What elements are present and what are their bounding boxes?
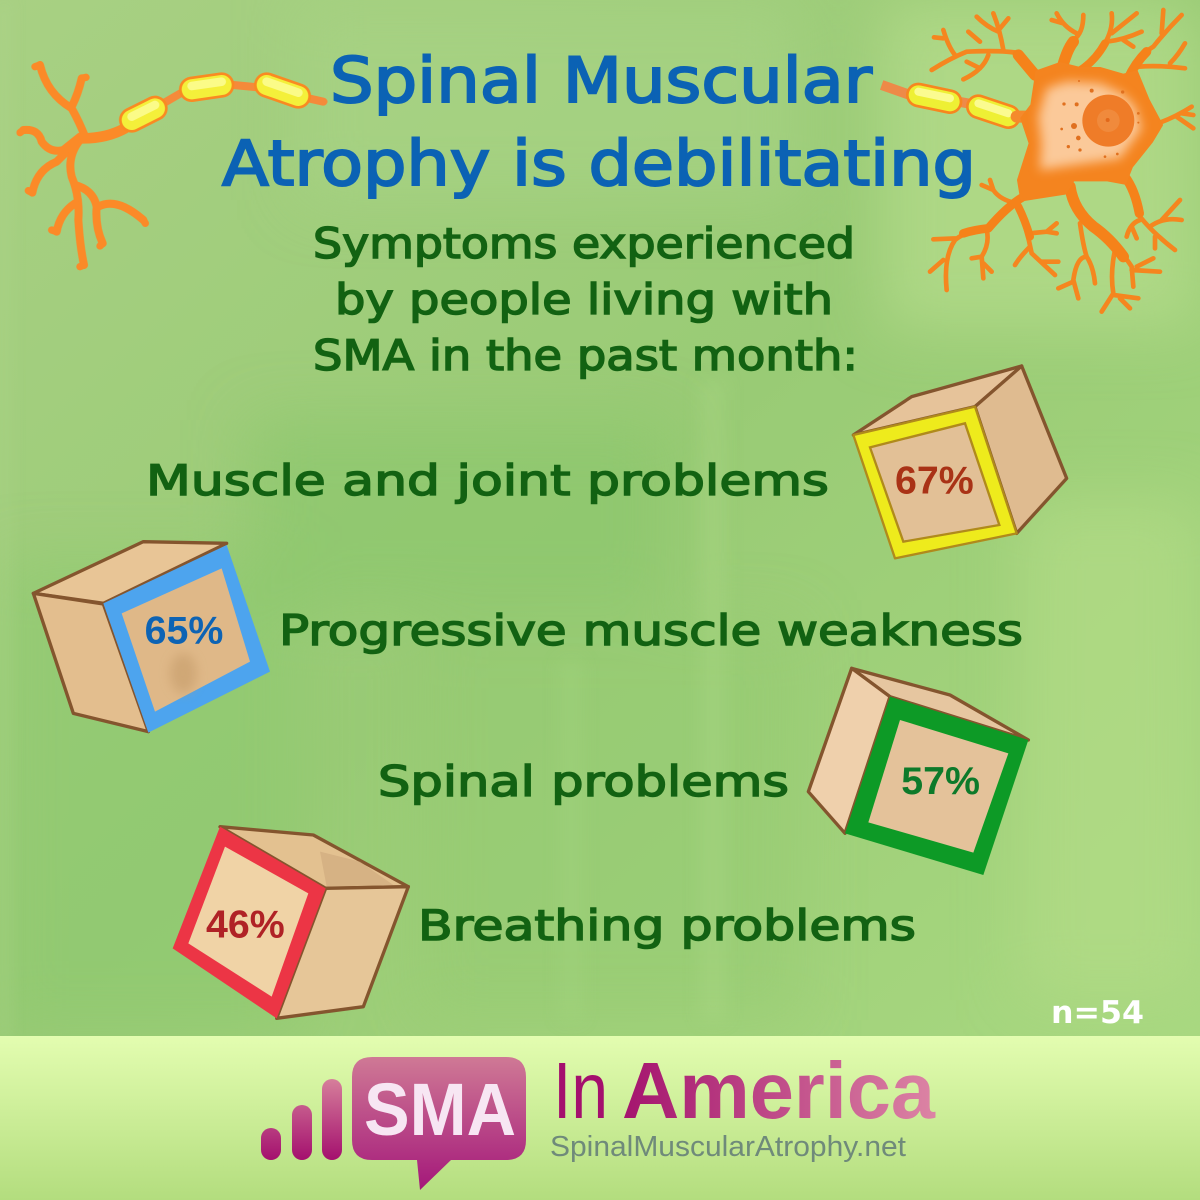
- logo SMA wordmark: SMA: [364, 1068, 516, 1151]
- sample size: n=54: [1051, 995, 1144, 1031]
- subtitle: Symptoms experienced: [313, 219, 855, 268]
- title: Spinal Muscular: [330, 44, 873, 117]
- footer band: [0, 1036, 1200, 1200]
- icon: green box 57%: [808, 668, 1028, 875]
- value 67%: 67%: [895, 458, 974, 502]
- title: Atrophy is debilitating: [222, 127, 976, 200]
- icon: right neuron: [882, 10, 1193, 312]
- icon: blue box 65%: [33, 542, 270, 733]
- icon: yellow box 67%: [853, 366, 1067, 558]
- value 65%: 65%: [145, 608, 223, 652]
- label: muscle and joint problems: Muscle and joint problems: [146, 456, 829, 505]
- logo America: America: [622, 1046, 935, 1135]
- left neuron dendrites: [20, 65, 323, 267]
- title: [222, 44, 976, 200]
- right neuron axon and myelin: [882, 85, 1037, 117]
- right neuron nucleus: [1060, 80, 1140, 158]
- right neuron cell body: [1018, 63, 1162, 200]
- label: progressive muscle weakness: Progressive muscle weakness: [279, 606, 1023, 655]
- label: spinal problems: Spinal problems: [378, 757, 789, 806]
- left neuron myelin segments: [132, 82, 298, 120]
- subtitle: by people living with: [335, 275, 833, 324]
- logo signal bars: [261, 1079, 342, 1160]
- value 57%: 57%: [901, 759, 980, 803]
- logo In: In: [553, 1046, 608, 1135]
- logo: SMA In America: [261, 1046, 935, 1190]
- icon: left neuron: [20, 65, 323, 267]
- label: breathing problems: Breathing problems: [418, 901, 916, 950]
- value 46%: 46%: [206, 903, 285, 947]
- logo URL: SpinalMuscularAtrophy.net: [550, 1131, 906, 1163]
- logo speech bubble: [352, 1057, 526, 1190]
- subtitle: [313, 219, 858, 380]
- subtitle: SMA in the past month:: [313, 331, 858, 380]
- right neuron dendrites: [930, 10, 1193, 312]
- right neuron dendrite trunks: [963, 42, 1147, 257]
- icon: red box 46%: [173, 827, 408, 1018]
